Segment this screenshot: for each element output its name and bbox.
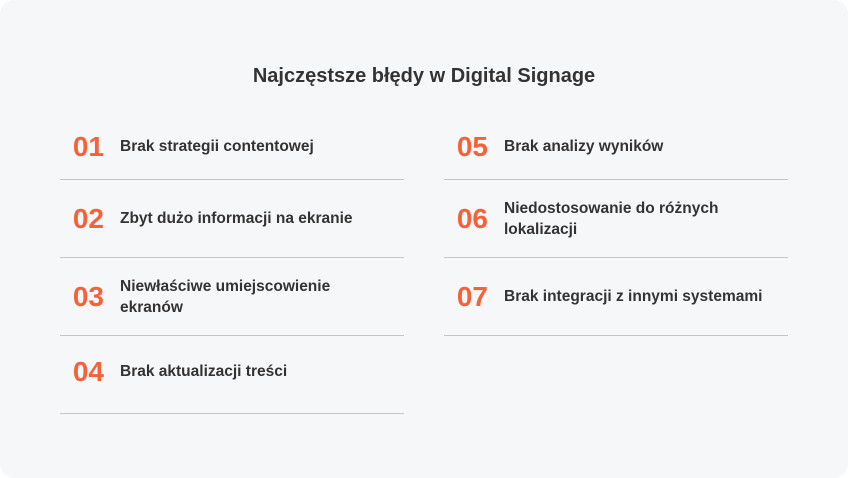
item 07: Brak integracji z innymi systemami	[504, 288, 762, 305]
item 05	[444, 102, 788, 180]
item 06: 06	[457, 203, 488, 234]
item 02: Zbyt dużo informacji na ekranie	[120, 210, 353, 227]
item 05: 05	[457, 131, 488, 162]
title: Najczęstsze błędy w Digital Signage	[253, 65, 595, 87]
item 04	[60, 336, 404, 414]
item 04: 04	[73, 356, 104, 387]
item 06	[444, 180, 788, 258]
item 07: 07	[457, 281, 488, 312]
item 01: 01	[73, 131, 104, 162]
item 03	[60, 258, 404, 336]
item 07	[444, 258, 788, 336]
item 03: 03	[73, 281, 104, 312]
item 02	[60, 180, 404, 258]
item 06: Niedostosowanie do różnych lokalizacji	[504, 200, 718, 238]
item 01	[60, 102, 404, 180]
item 05: Brak analizy wyników	[504, 138, 663, 155]
item 03: Niewłaściwe umiejscowienie ekranów	[120, 278, 330, 316]
item 04: Brak aktualizacji treści	[120, 363, 287, 380]
item 01: Brak strategii contentowej	[120, 138, 314, 155]
item 02: 02	[73, 203, 104, 234]
